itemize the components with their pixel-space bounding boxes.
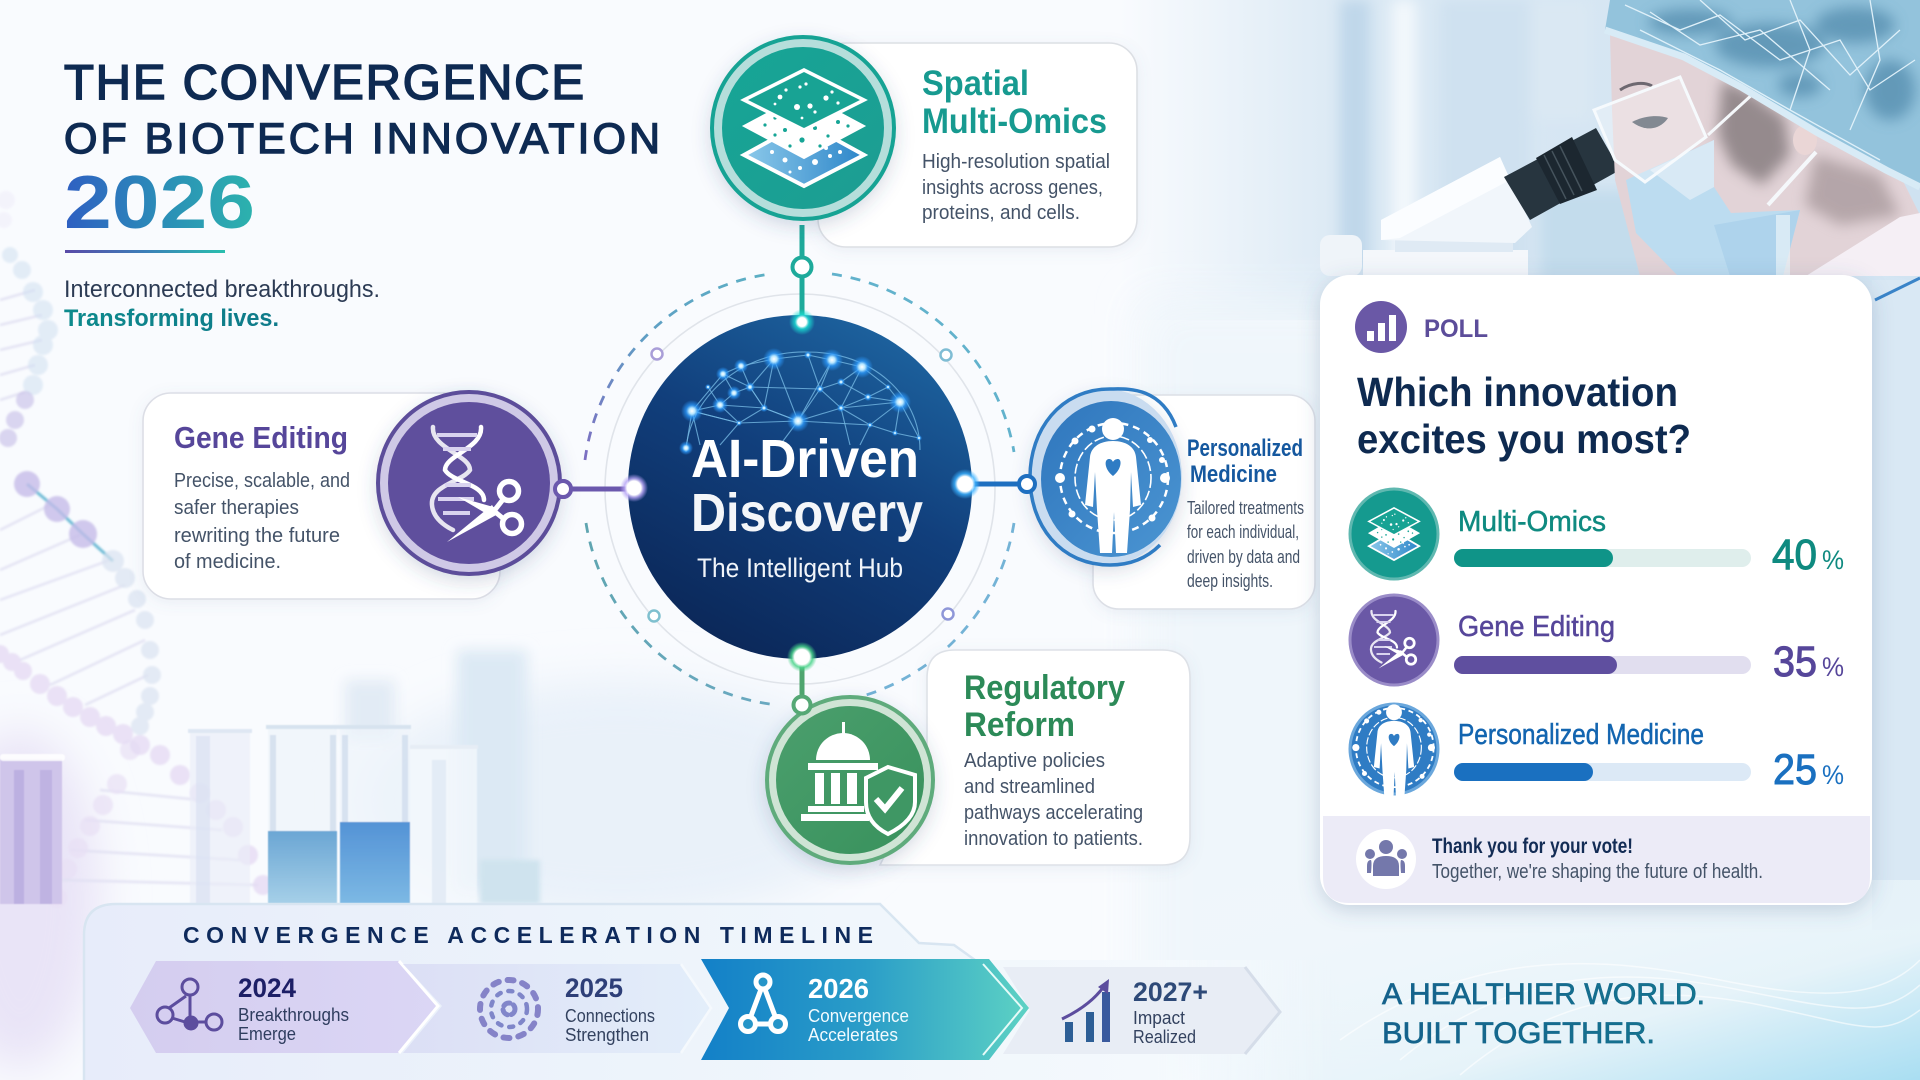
title block: 2026: [64, 160, 255, 244]
timeline step: 2024: Breakthroughs: [238, 1005, 349, 1025]
title block: OF BIOTECH INNOVATION: [64, 115, 660, 163]
panel: timeline: CONVERGENCE ACCELERATION TIMELINE: [183, 922, 873, 948]
poll row: gene editing: 35: [1773, 638, 1817, 686]
timeline step: 2027+: Impact: [1133, 1008, 1185, 1028]
title block: Transforming lives.: [64, 305, 279, 332]
central hub: Discovery: [691, 483, 923, 543]
heading: line one: THE CONVERGENCE: [64, 56, 584, 110]
poll footer: Thank you for your vote!: [1432, 835, 1633, 858]
photo: scientist at microscope: [1320, 0, 1920, 300]
question: Which innovation: [1357, 369, 1678, 415]
timeline step: 2026: Accelerates: [808, 1025, 898, 1045]
panel: spatial multi-omics: proteins, and cells.: [922, 202, 1080, 224]
poll header: [1355, 301, 1488, 353]
panel: personalized medicine: for each individual,: [1187, 522, 1299, 542]
timeline step: 2024: 2024: [238, 973, 296, 1003]
panel: regulatory reform: [767, 650, 1190, 865]
face and neck: [1610, 35, 1920, 276]
panel: spatial multi-omics: Multi-Omics: [922, 102, 1107, 141]
question: [1357, 369, 1691, 462]
hub heading: AI-Driven: [691, 429, 919, 489]
poll row: gene editing: %: [1822, 652, 1844, 682]
panel: spatial multi-omics: Spatial: [922, 64, 1029, 103]
hairnet: [1605, 0, 1920, 187]
timeline step: 2026: 2026: [808, 973, 869, 1004]
background: DNA helix: [0, 191, 273, 908]
poll row: multi-omics: %: [1822, 545, 1844, 575]
brain network: [679, 348, 922, 455]
connectors: [555, 225, 1027, 705]
timeline step: 2024: [130, 961, 438, 1053]
panel: gene editing: safer therapies: [174, 497, 299, 519]
lab coat: [1806, 213, 1920, 276]
poll row: multi-omics: Multi-Omics: [1458, 506, 1606, 538]
panel: spatial multi-omics: insights across genes,: [922, 177, 1103, 199]
panel: personalized medicine: driven by data and: [1187, 547, 1300, 567]
central hub: [620, 309, 980, 672]
icon: capitol and shield: [801, 722, 915, 834]
goggles: [1594, 77, 1706, 182]
panel: spatial multi-omics: High-resolution spatial: [922, 151, 1110, 173]
poll row: multi-omics: 40: [1772, 531, 1817, 579]
poll row: personalized medicine: Personalized Medicine: [1458, 719, 1704, 751]
timeline step: 2025: [403, 964, 711, 1053]
microscope: [1320, 128, 1620, 276]
timeline step: 2025: Connections: [565, 1006, 655, 1026]
poll row: personalized medicine: %: [1822, 760, 1844, 790]
timeline step: 2027+: 2027+: [1133, 977, 1208, 1007]
timeline step: 2027+: Realized: [1133, 1027, 1196, 1047]
background: lab glassware: [0, 650, 540, 904]
tagline: A HEALTHIER WORLD.: [1382, 978, 1705, 1011]
timeline step: 2026: [701, 959, 1029, 1060]
question: excites you most?: [1357, 416, 1691, 462]
title block: Interconnected breakthroughs.: [64, 276, 380, 303]
poll footer: [1323, 816, 1870, 903]
panel: personalized medicine: Personalized: [1187, 435, 1303, 462]
panel: gene editing: of medicine.: [174, 551, 281, 573]
rings around hub: [585, 274, 1014, 704]
panel: personalized medicine: Medicine: [1190, 461, 1277, 488]
timeline step: 2026: Convergence: [808, 1006, 909, 1026]
panel: poll: [1320, 275, 1872, 905]
timeline step: 2025: Strengthen: [565, 1025, 649, 1045]
panel: regulatory reform: Regulatory: [964, 669, 1125, 707]
surgical mask: [1626, 140, 1800, 276]
tagline: BUILT TOGETHER.: [1382, 1017, 1655, 1050]
panel: gene editing: Precise, scalable, and: [174, 470, 350, 492]
central hub: The Intelligent Hub: [697, 553, 903, 583]
panel: spatial multi-omics: [712, 37, 1137, 247]
panel: regulatory reform: innovation to patients.: [964, 828, 1143, 850]
poll row: multi-omics: [1350, 489, 1844, 579]
panel: gene editing: rewriting the future: [174, 525, 340, 547]
panel: regulatory reform: Adaptive policies: [964, 750, 1105, 772]
panel: timeline: [84, 904, 1340, 1080]
panel: gene editing: Gene Editing: [174, 420, 348, 455]
panel: personalized medicine: deep insights.: [1187, 571, 1273, 591]
poll row: gene editing: Gene Editing: [1458, 611, 1615, 643]
timeline step: 2027+: [1003, 967, 1280, 1054]
panel: regulatory reform: Reform: [964, 706, 1075, 744]
panel: personalized medicine: Tailored treatments: [1187, 498, 1304, 518]
poll row: gene editing: [1350, 595, 1844, 686]
panel: regulatory reform: and streamlined: [964, 776, 1095, 798]
tagline: [1382, 978, 1705, 1050]
panel: personalized medicine: [1019, 389, 1315, 609]
poll header: POLL: [1424, 315, 1488, 343]
poll row: personalized medicine: 25: [1773, 746, 1817, 794]
panel: regulatory reform: pathways accelerating: [964, 802, 1143, 824]
poll footer: Together, we're shaping the future of health.: [1432, 861, 1763, 883]
timeline step: 2025: 2025: [565, 973, 623, 1003]
timeline step: 2024: Emerge: [238, 1024, 296, 1044]
poll row: personalized medicine: [1350, 704, 1844, 802]
panel: gene editing: [143, 392, 571, 599]
title block: [64, 56, 660, 332]
